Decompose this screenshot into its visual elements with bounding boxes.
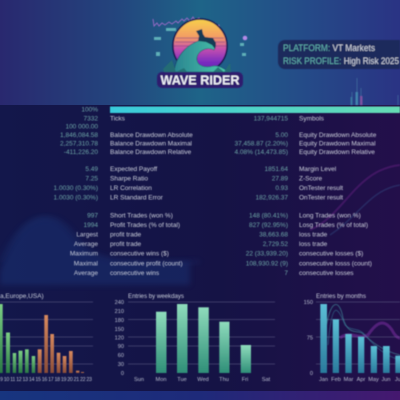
green session bars [0, 304, 35, 373]
logo sun stripes [174, 38, 226, 46]
logo nodes [154, 28, 247, 56]
y axis: 150 [115, 327, 124, 333]
stats table: left numbers: Maximal [74, 260, 99, 268]
weekday axis: Fri [242, 377, 248, 383]
y axis: 0 [310, 371, 313, 377]
chart: entries by weekdays [115, 293, 275, 383]
y axis: 60 [118, 353, 124, 359]
stats table: right numbers: 7 [284, 270, 288, 277]
badge: platform and risk profile [278, 40, 400, 69]
stats table: right labels: OnTester result [299, 185, 343, 192]
logo foliage [163, 60, 231, 80]
stats table: left labels: consecutive profit (count) [110, 260, 183, 268]
platform line: PLATFORM: VT Markets [283, 43, 375, 53]
stats table: right numbers: 4.08% (14,473.85) [235, 149, 288, 156]
month axis: Feb [331, 377, 341, 383]
stats table: right numbers: 827 (92.95%) [249, 222, 288, 229]
stats table: left labels: Expected Payoff [110, 166, 157, 173]
badge background [278, 40, 400, 69]
stats table: right labels: Equity Drawdown Relative [299, 149, 375, 156]
chart title: Entries by months [316, 293, 367, 300]
month axis [319, 377, 400, 383]
chart title: Entries by weekdays [128, 293, 185, 300]
background wave decoration [0, 165, 400, 285]
logo name: WAVE RIDER [160, 74, 240, 88]
y axis: 210 [115, 309, 124, 315]
stats table: right numbers: 5.00 [275, 132, 288, 139]
stats table: left labels: consecutive wins ($) [110, 250, 169, 258]
chart: entries by hours [0, 293, 93, 383]
hour axis: 9 10 11 12 13 14 15 16 17 18 19 20 21 22 23 [0, 377, 92, 383]
chart title: a,Europe,USA) [0, 293, 44, 300]
stats table: right numbers: 148 (80.41%) [249, 212, 288, 220]
month axis: Jan [319, 377, 328, 383]
candlestick decoration [350, 78, 398, 105]
stats table: right labels: consecutive losss (count) [299, 260, 372, 268]
stats table: left numbers: Average [74, 241, 98, 248]
stats table: left labels: Sharpe Ratio [110, 176, 148, 182]
logo sparkline [153, 17, 220, 30]
stats table: right labels: Losg Trades (% of total) [299, 222, 368, 229]
stats table: right labels: Long Trades (won %) [299, 212, 361, 220]
table background [0, 105, 400, 391]
weekday axis: Sun [134, 377, 144, 383]
weekday bars [156, 304, 251, 373]
stats table: right numbers: 137,944715 [254, 116, 288, 122]
y axis: 30 [118, 362, 124, 368]
stats table: left labels: Balance Drawdown Relative [110, 149, 192, 156]
logo rider [196, 29, 216, 49]
stats table: right labels: OnTester result [299, 194, 343, 202]
stats table: left numbers: Average [74, 270, 98, 277]
stats table: left numbers: 1.0030 (0.30%) [54, 185, 98, 192]
bottom strip [0, 391, 400, 400]
stats table: right labels: loss trade [299, 232, 328, 238]
stats table: right numbers: 0.93 [275, 185, 288, 192]
stats table: left numbers: 5.49 [85, 166, 98, 173]
month bars [320, 304, 400, 373]
stats table: right labels: Z-Score [299, 176, 322, 182]
stats table: right labels: Equity Drawdown Maximal [299, 140, 376, 148]
stats table: right numbers: 182,926.37 [255, 194, 288, 202]
orange session bars [38, 315, 84, 373]
stats table: left labels [110, 116, 193, 277]
stats table: left labels: Short Trades (won %) [110, 212, 173, 220]
stats table: left numbers: 1994 [84, 222, 98, 229]
months wave decoration [325, 305, 400, 360]
weekday axis [134, 377, 271, 383]
y axis: 90 [118, 344, 124, 350]
stats table: right labels: consecutive losses ($) [299, 250, 363, 258]
stats table: left labels: Profit Trades (% of total) [110, 222, 180, 229]
y axis [115, 300, 124, 377]
month axis: Jun [381, 377, 391, 383]
stats table: left labels: consecutive wins [110, 270, 160, 277]
stats table: left numbers: 2,257,310.78 [60, 140, 98, 148]
month axis: May [368, 377, 379, 383]
stats table: left numbers: 7332 [84, 116, 98, 122]
month axis: Apr [357, 377, 365, 383]
stats table: left numbers: 1.0030 (0.30%) [54, 194, 98, 202]
stats table: left labels: Balance Drawdown Absolute [110, 132, 193, 139]
stats table: right numbers: 38,663.68 [259, 232, 288, 238]
stats table: left numbers: 997 [87, 212, 98, 220]
stats table: right numbers: 108,930.92 (9) [246, 260, 288, 268]
month axis: Mar [344, 377, 353, 383]
progress bar [110, 106, 400, 113]
header background [0, 0, 400, 106]
stats table: left numbers [54, 106, 99, 277]
chart: entries by months [304, 293, 400, 383]
stats table: right numbers: 37,458.87 (2.20%) [235, 140, 288, 148]
stats table: right numbers: 27.89 [272, 176, 288, 182]
stats table: left labels: profit trade [110, 232, 141, 238]
y axis: 150 [304, 300, 313, 306]
stats table: left labels: LR Correlation [110, 185, 152, 192]
stats table: right numbers: 2,729.52 [263, 241, 288, 248]
logo: Wave Rider [153, 17, 247, 88]
logo sun [173, 19, 227, 73]
y axis: 120 [115, 336, 124, 342]
logo name plate [157, 72, 243, 88]
weekday axis: Wed [197, 377, 209, 383]
stats table: right labels: Symbols [299, 116, 325, 122]
y axis [304, 300, 313, 377]
stats table: right labels: Equity Drawdown Absolute [299, 132, 377, 139]
stats table: right labels: Margin Level [299, 166, 337, 173]
weekday axis: Mon [156, 377, 166, 383]
stats table: left labels: profit trade [110, 241, 141, 248]
stats table: left labels: Ticks [110, 116, 126, 122]
stats table: left numbers: 100% [81, 106, 98, 114]
stats table: right labels [299, 116, 377, 277]
weekday axis: Thu [219, 377, 229, 383]
stats table: right labels: loss trade [299, 241, 328, 248]
stats table: left labels: Balance Drawdown Maximal [110, 140, 193, 148]
stats table: right numbers [235, 116, 288, 277]
stats table: right numbers: 22 (33,939.20) [246, 250, 288, 258]
weekday axis: Tue [177, 377, 187, 383]
y axis: 0 [121, 371, 124, 377]
logo wave [174, 39, 228, 72]
stats table: right labels: consecutive losses [299, 270, 354, 277]
stats table: right numbers: 1851.64 [264, 166, 288, 173]
stats table: left numbers: 1,846,084.58 [60, 132, 98, 139]
stats table: left numbers: Maximum [70, 250, 98, 258]
stats table: left labels: LR Standard Error [110, 194, 164, 202]
y axis: 240 [115, 300, 124, 306]
stats table: left numbers: Largest [76, 232, 98, 238]
stats table: left numbers: -411,226.20 [64, 149, 98, 156]
stats table: left numbers: 7.25 [85, 176, 98, 182]
weekday axis: Sat [262, 377, 271, 383]
y axis: 75 [307, 336, 313, 342]
stats table: left numbers: 100 000.00 [65, 124, 98, 130]
y axis: 180 [115, 318, 124, 324]
